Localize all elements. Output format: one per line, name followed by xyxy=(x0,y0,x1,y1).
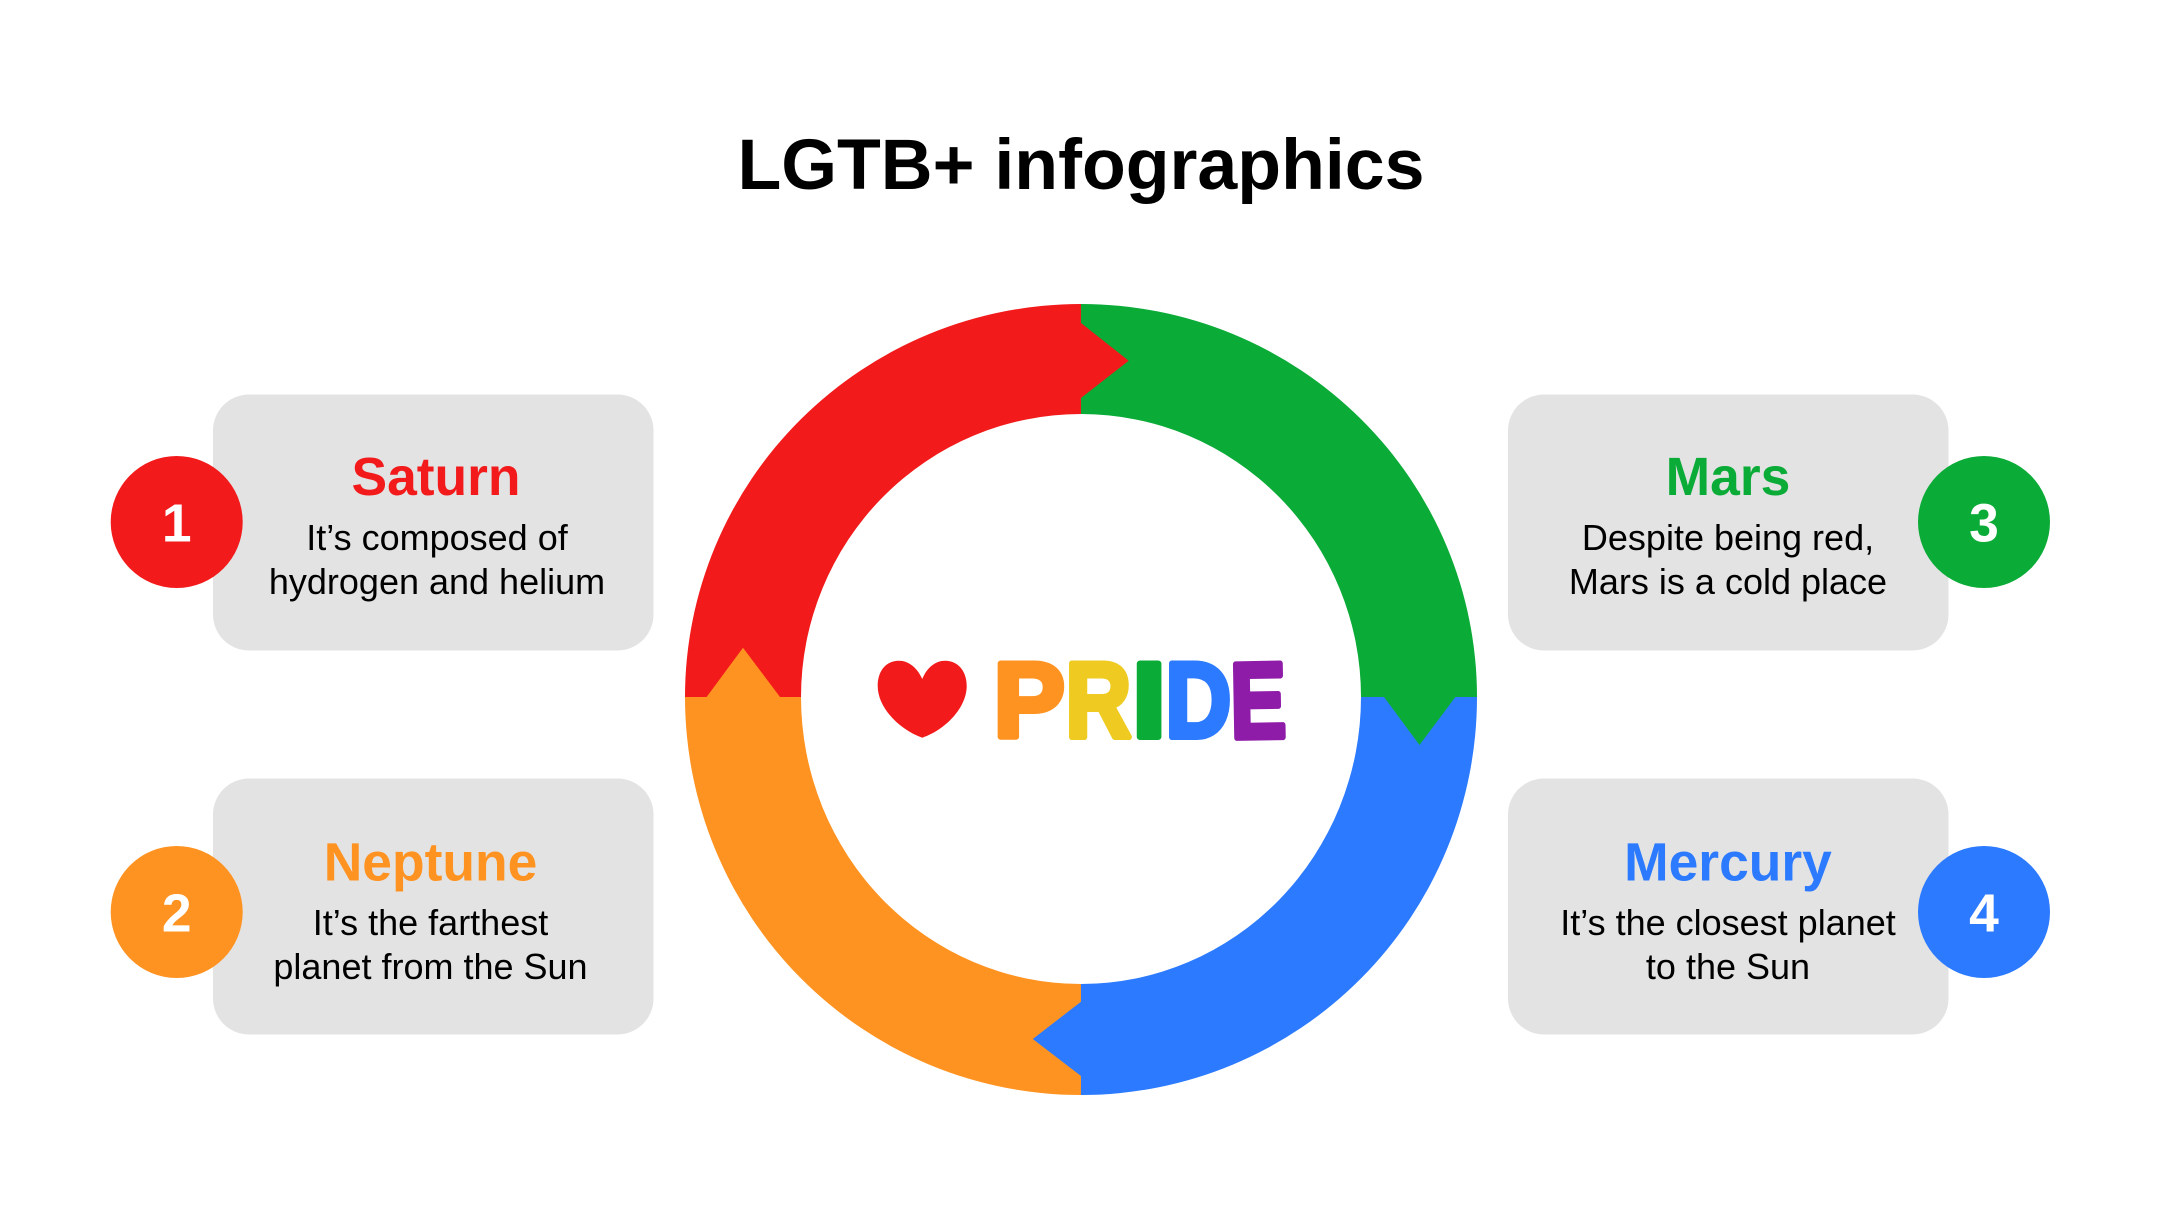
card background xyxy=(213,394,654,650)
word: PRIDE xyxy=(994,640,1287,761)
word: PRIDE: R xyxy=(1066,641,1131,761)
word: PRIDE: D xyxy=(1166,641,1231,761)
number badge: 4 xyxy=(1969,884,1999,944)
word: PRIDE: E xyxy=(1229,641,1287,761)
number badge: 3 xyxy=(1969,494,1999,554)
word: PRIDE: I xyxy=(1132,641,1166,760)
description: planet from the Sun xyxy=(273,946,588,987)
description: Mars is a cold place xyxy=(1569,561,1887,602)
description: It’s the farthest xyxy=(313,902,548,943)
arrow head: red xyxy=(1081,323,1129,398)
arrow head: orange xyxy=(707,648,780,697)
number badge xyxy=(1918,846,2050,978)
chart: circular arrow ring xyxy=(685,304,1477,1095)
description: It’s composed of xyxy=(306,517,569,558)
arrow head: blue xyxy=(1033,1002,1081,1076)
panel: Mercury xyxy=(1508,778,2050,1034)
description: to the Sun xyxy=(1646,946,1810,987)
ring segment: red xyxy=(685,304,1081,697)
heading: Neptune xyxy=(324,834,537,892)
panel: Neptune xyxy=(111,778,653,1034)
number badge xyxy=(111,846,243,978)
number badge xyxy=(1918,456,2050,588)
card background xyxy=(1508,778,1948,1034)
description: Despite being red, xyxy=(1582,517,1874,558)
panel: Saturn xyxy=(111,394,653,650)
title: LGTB+ infographics xyxy=(737,125,1425,205)
ring segment: blue xyxy=(1081,697,1477,1095)
number badge: 1 xyxy=(162,494,192,554)
arrow head: green xyxy=(1384,697,1455,745)
heading: Mars xyxy=(1666,448,1790,507)
card background xyxy=(1508,394,1948,650)
panel: Mars xyxy=(1508,394,2050,650)
description: hydrogen and helium xyxy=(269,561,605,602)
heading: Saturn xyxy=(351,448,521,507)
number badge xyxy=(111,456,243,588)
word: PRIDE: P xyxy=(994,640,1065,760)
heading: Mercury xyxy=(1624,834,1832,892)
icon: heart xyxy=(878,661,967,738)
ring segment: green xyxy=(1081,304,1477,697)
card background xyxy=(213,778,654,1034)
number badge: 2 xyxy=(162,884,192,944)
ring segment: orange xyxy=(685,697,1081,1095)
description: It’s the closest planet xyxy=(1560,902,1896,943)
center logo: heart and PRIDE xyxy=(878,640,1287,761)
